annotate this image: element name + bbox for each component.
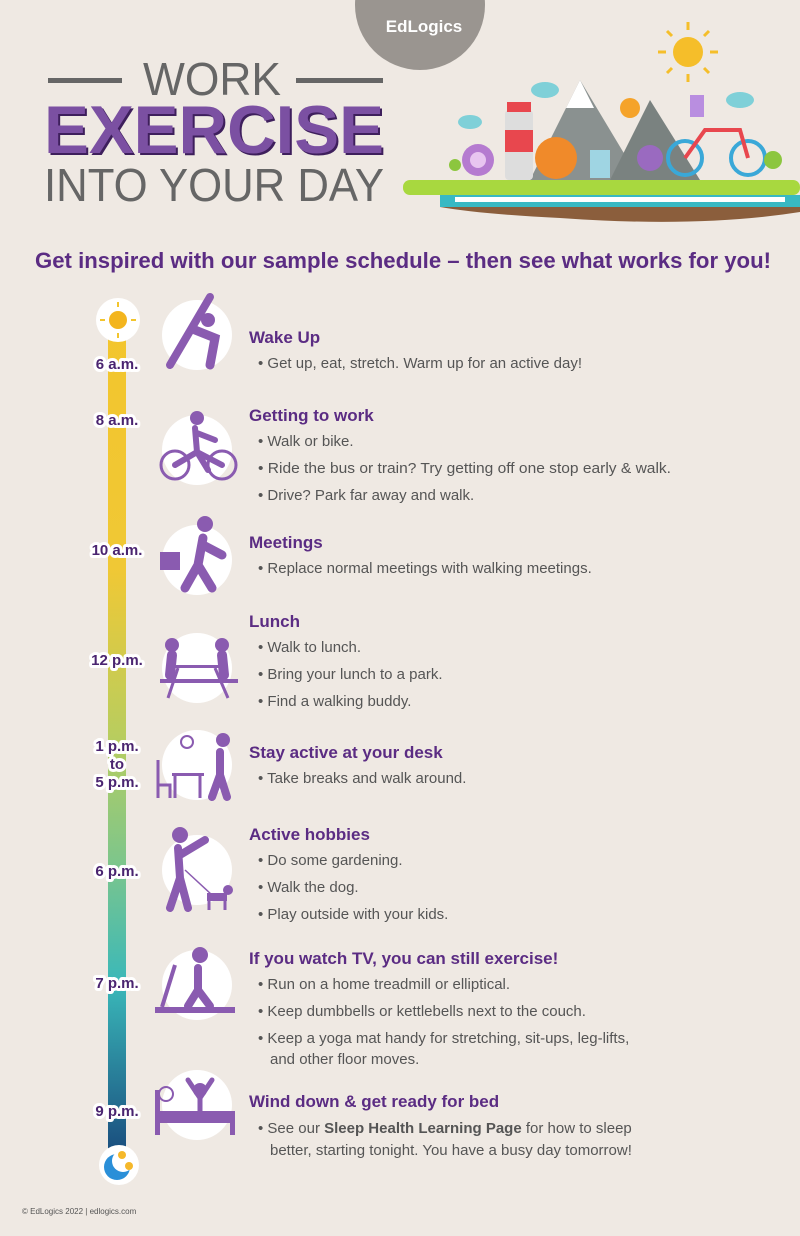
- logo: [355, 0, 485, 70]
- time labels: 8 a.m.: [96, 412, 138, 429]
- time labels: 6 p.m.: [95, 863, 139, 880]
- section: wake up: Wake Up: [249, 328, 320, 347]
- title: [44, 53, 386, 211]
- logo: EdLogics: [386, 17, 462, 36]
- section: hobbies: Active hobbies: [249, 825, 370, 844]
- icon: dog walker: [162, 827, 233, 910]
- title: EXERCISE: [44, 92, 384, 168]
- section: bed: Wind down & get ready for bed: [249, 1092, 499, 1111]
- section: meetings: • Replace normal meetings with walking meetings.: [258, 560, 592, 577]
- time labels: to: [110, 756, 124, 773]
- time labels: 7 p.m.: [95, 975, 139, 992]
- section: tv: • Keep a yoga mat handy for stretching, sit-ups, leg-lifts,: [258, 1030, 629, 1047]
- section: tv: • Keep dumbbells or kettlebells next to the couch.: [258, 1003, 586, 1020]
- section: meetings: [249, 533, 592, 577]
- icon: desk: [158, 730, 232, 800]
- time labels: 12 p.m.: [91, 652, 143, 669]
- title: EXERCISE: [46, 94, 386, 170]
- section: getting to work: • Drive? Park far away and walk.: [258, 487, 474, 504]
- section: hobbies: • Walk the dog.: [258, 879, 359, 896]
- section: tv: • Run on a home treadmill or elliptical.: [258, 976, 510, 993]
- section: hobbies: • Play outside with your kids.: [258, 906, 448, 923]
- section: hobbies: • Do some gardening.: [258, 852, 402, 869]
- section: tv: If you watch TV, you can still exercise!: [249, 949, 558, 968]
- section: getting to work: [249, 406, 671, 504]
- time labels: 1 p.m.: [95, 738, 139, 755]
- title: WORK: [143, 53, 281, 105]
- section: wake up: [249, 328, 582, 372]
- icon: moon bottom: [99, 1145, 139, 1185]
- time labels: 6 a.m.: [96, 356, 138, 373]
- section: meetings: Meetings: [249, 533, 323, 552]
- title: INTO YOUR DAY: [44, 159, 384, 211]
- icon: bed: [155, 1070, 235, 1140]
- section: desk: Stay active at your desk: [249, 743, 443, 762]
- timeline bar: [108, 320, 126, 1150]
- time labels: 10 a.m.: [92, 542, 142, 559]
- section: getting to work: • Ride the bus or train? Try getting off one stop early & walk.: [258, 460, 671, 477]
- section: tv: [249, 949, 629, 1068]
- section: bed: better, starting tonight. You have a busy day tomorrow!: [270, 1142, 632, 1159]
- section: bed: • See our Sleep Health Learning Page for how to sleep: [258, 1120, 632, 1137]
- section: desk: [249, 743, 466, 787]
- section: lunch: • Find a walking buddy.: [258, 693, 411, 710]
- section: lunch: Lunch: [249, 612, 300, 631]
- icon: bike: [161, 411, 236, 485]
- section: lunch: [249, 612, 443, 710]
- time labels: [91, 356, 143, 1120]
- section: getting to work: • Walk or bike.: [258, 433, 354, 450]
- icon: lunch: [160, 633, 238, 703]
- section: desk: • Take breaks and walk around.: [258, 770, 466, 787]
- section: hobbies: [249, 825, 448, 923]
- time labels: 5 p.m.: [95, 774, 139, 791]
- section: tv: and other floor moves.: [270, 1051, 419, 1068]
- section: lunch: • Bring your lunch to a park.: [258, 666, 443, 683]
- section: bed: [249, 1092, 632, 1159]
- icon: stretch: [162, 297, 232, 370]
- section: lunch: • Walk to lunch.: [258, 639, 361, 656]
- subtitle: Get inspired with our sample schedule – then see what works for you!: [35, 248, 771, 273]
- time labels: 9 p.m.: [95, 1103, 139, 1120]
- section: getting to work: Getting to work: [249, 406, 374, 425]
- section: wake up: • Get up, eat, stretch. Warm up for an active day!: [258, 355, 582, 372]
- icon: treadmill: [155, 947, 235, 1020]
- icon: meeting walker: [160, 516, 232, 595]
- illustration: [403, 22, 800, 222]
- footer: © EdLogics 2022 | edlogics.com: [22, 1207, 137, 1216]
- icon: sun top: [96, 298, 140, 342]
